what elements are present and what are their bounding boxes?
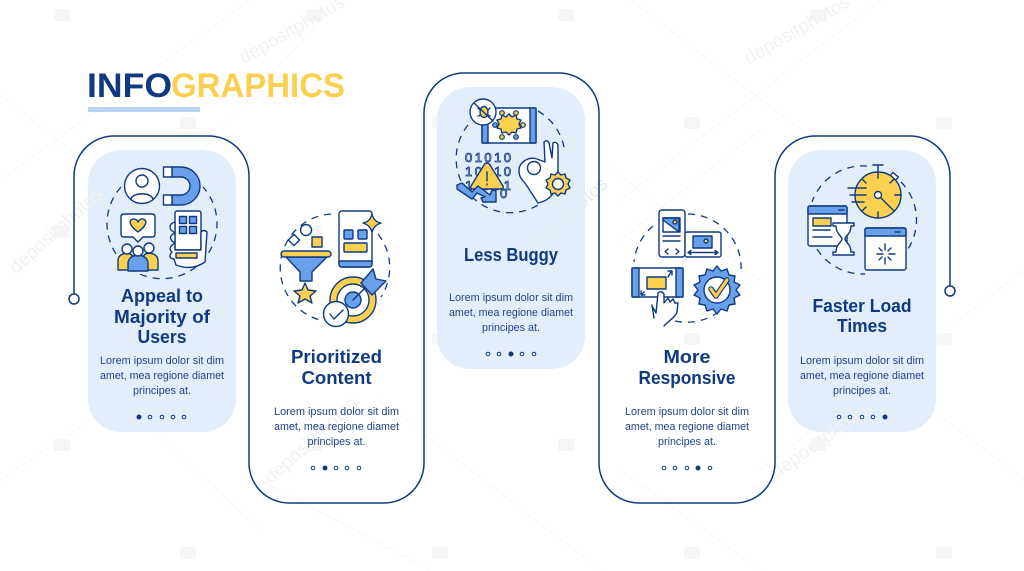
text: less buggy: Lorem ipsum dolor sit dim	[449, 292, 573, 304]
text: depositphotos	[767, 398, 876, 483]
text: depositphotos	[510, 174, 612, 268]
pagination dots 4	[662, 466, 712, 470]
text: appeal to majority of users: Appeal to	[121, 286, 203, 306]
text: faster load times: Lorem ipsum dolor sit dim	[800, 355, 924, 367]
icon: bug, code, warning, ok hand: 10010	[465, 164, 511, 179]
text: prioritized content	[274, 347, 399, 448]
text: faster load times: principes at.	[833, 385, 891, 397]
icon: stopwatch, hourglass, windows	[808, 165, 917, 274]
text: faster load times: Faster Load	[812, 296, 912, 316]
text: faster load times: Times	[837, 316, 887, 336]
pagination dots 3	[486, 352, 536, 356]
icon: responsive screens, gear check	[632, 210, 741, 326]
text: appeal to majority of users: amet, mea regione diamet	[100, 370, 224, 382]
text: prioritized content: Content	[302, 368, 372, 388]
text: less buggy	[449, 245, 573, 334]
text: more responsive: principes at.	[658, 436, 716, 448]
text: less buggy: Less Buggy	[464, 245, 558, 265]
text: appeal to majority of users	[100, 286, 224, 397]
icon: bug, code, warning, ok hand: 0	[500, 186, 507, 201]
text: depositphotos	[5, 184, 107, 278]
text: more responsive	[625, 347, 749, 448]
text: faster load times	[800, 296, 924, 397]
text: prioritized content: principes at.	[308, 436, 366, 448]
text: more responsive: amet, mea regione diamet	[625, 421, 749, 433]
text: faster load times: amet, mea regione diamet	[800, 370, 924, 382]
pagination dots 2	[311, 466, 361, 470]
text: more responsive: Responsive	[638, 368, 736, 388]
text: appeal to majority of users: Users	[138, 327, 186, 347]
text: appeal to majority of users: Majority of	[114, 307, 211, 327]
text: more responsive: More	[664, 347, 710, 367]
text: appeal to majority of users: Lorem ipsum dolor sit dim	[100, 355, 224, 367]
title: INFO	[87, 67, 172, 105]
icon: funnel, phone, target	[280, 211, 390, 326]
serpentine outline connector	[69, 73, 955, 503]
text: prioritized content: Lorem ipsum dolor sit dim	[274, 406, 399, 418]
text: appeal to majority of users: principes at.	[133, 385, 191, 397]
icon: bug, code, warning, ok hand	[456, 99, 570, 213]
text: prioritized content: amet, mea regione diamet	[274, 421, 399, 433]
pagination dots 5	[837, 415, 887, 419]
text: less buggy: amet, mea regione diamet	[449, 307, 573, 319]
panel background: faster load times	[788, 150, 936, 432]
panel background: less buggy	[437, 87, 585, 369]
title: GRAPHICS	[171, 67, 345, 105]
text: depositphotos	[260, 394, 362, 488]
icon: bug, code, warning, ok hand: 01010	[465, 150, 511, 165]
title	[87, 67, 345, 112]
pagination dots 1	[137, 415, 186, 419]
panel background: appeal to majority	[88, 150, 236, 432]
text: less buggy: principes at.	[482, 322, 540, 334]
text: more responsive: Lorem ipsum dolor sit dim	[625, 406, 749, 418]
icon: bug, code, warning, ok hand: 1 001	[465, 178, 511, 193]
text: prioritized content: Prioritized	[291, 347, 382, 367]
icon: users, magnet, phone	[107, 167, 217, 279]
